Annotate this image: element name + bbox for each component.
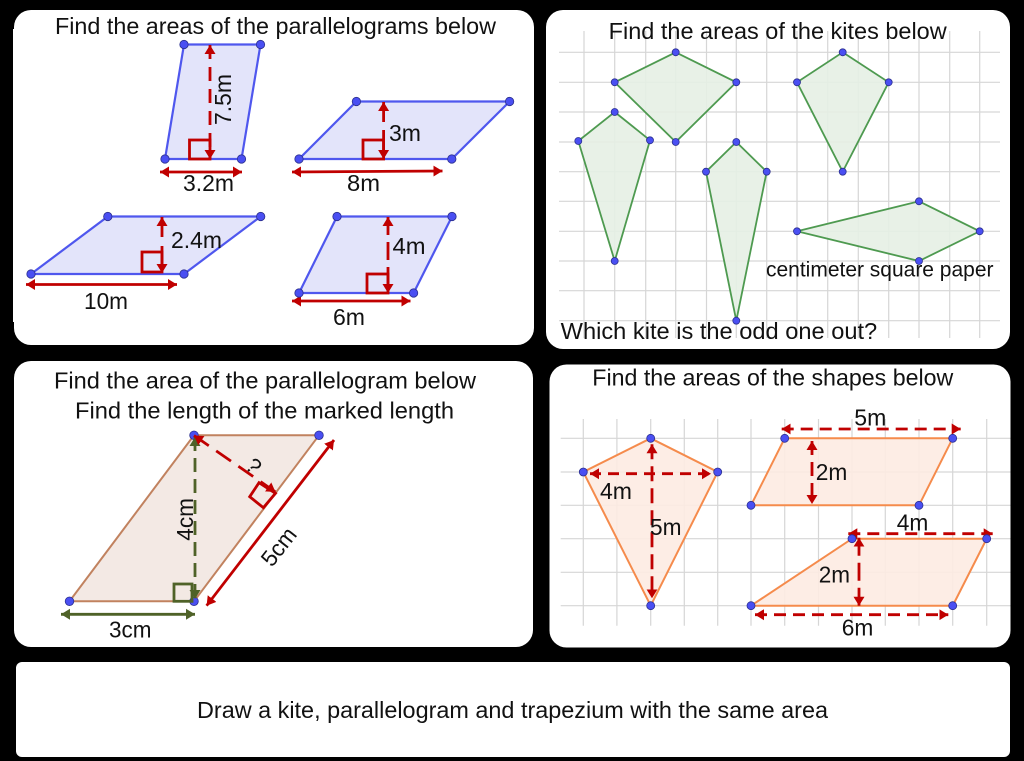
kite top left: [611, 49, 740, 145]
parallelogram with perpendicular heights: [61, 431, 334, 643]
parallelogram 10m by 2.4m: 10m: [84, 288, 128, 314]
parallelogram 6m by 4m: 4m: [392, 233, 426, 259]
parallelogram with perpendicular heights: ?: [240, 453, 267, 479]
parallelogram 6m by 4m: 6m: [333, 304, 365, 330]
panel: kites: [546, 10, 1010, 349]
kite 4m by 5m: 4m: [600, 478, 632, 504]
parallelogram 5m by 2m: 5m: [854, 405, 886, 431]
panel: mixed shapes: [550, 364, 1010, 648]
parallelogram with perpendicular heights: 3cm: [109, 617, 152, 643]
parallelogram with perpendicular heights: 5cm: [255, 522, 302, 571]
kite horizontal: [794, 198, 983, 264]
parallelogram 6m by 4m: [292, 212, 456, 330]
parallelogram 10m by 2.4m: 2.4m: [171, 227, 222, 253]
parallelogram 10m by 2.4m: [26, 212, 265, 314]
parallelogram 3.2m by 7.5m: [160, 40, 265, 196]
parallelogram 5m by 2m: 2m: [816, 459, 847, 485]
kite tall centre: [702, 138, 770, 324]
challenge text: Draw a kite, parallelogram and trapezium with the same area: [197, 697, 828, 723]
heading: parallelograms: Find the areas of the parallelograms below: [55, 13, 496, 39]
kite 4m by 5m: 5m: [650, 514, 682, 540]
panel: drawing challenge: [16, 662, 1010, 757]
trapezium 4m, 6m, 2m: 4m: [897, 510, 928, 536]
heading line two: Find the length of the marked length: [75, 397, 454, 423]
kite left: [575, 108, 654, 264]
heading: shapes: Find the areas of the shapes below: [592, 365, 954, 391]
parallelogram 8m by 3m: [292, 97, 514, 196]
panel: parallelogram missing length: [14, 361, 533, 647]
question: odd one out: Which kite is the odd one out?: [561, 318, 877, 344]
parallelogram 3.2m by 7.5m: 3.2m: [183, 170, 234, 196]
heading: kites: Find the areas of the kites below: [609, 18, 947, 44]
parallelogram 5m by 2m: [747, 405, 961, 509]
trapezium 4m, 6m, 2m: 2m: [819, 561, 850, 587]
panel: parallelograms: [13, 10, 534, 345]
trapezium 4m, 6m, 2m: [747, 510, 993, 641]
note: square paper: centimeter square paper: [766, 259, 994, 282]
parallelogram with perpendicular heights: 4cm: [172, 498, 198, 541]
kite 4m by 5m: [579, 434, 722, 610]
trapezium 4m, 6m, 2m: 6m: [842, 615, 873, 641]
parallelogram 8m by 3m: 8m: [347, 170, 380, 196]
parallelogram 8m by 3m: 3m: [389, 120, 421, 146]
kite top right: [794, 49, 892, 175]
heading line one: Find the area of the parallelogram below: [54, 367, 476, 393]
parallelogram 3.2m by 7.5m: 7.5m: [210, 74, 236, 125]
